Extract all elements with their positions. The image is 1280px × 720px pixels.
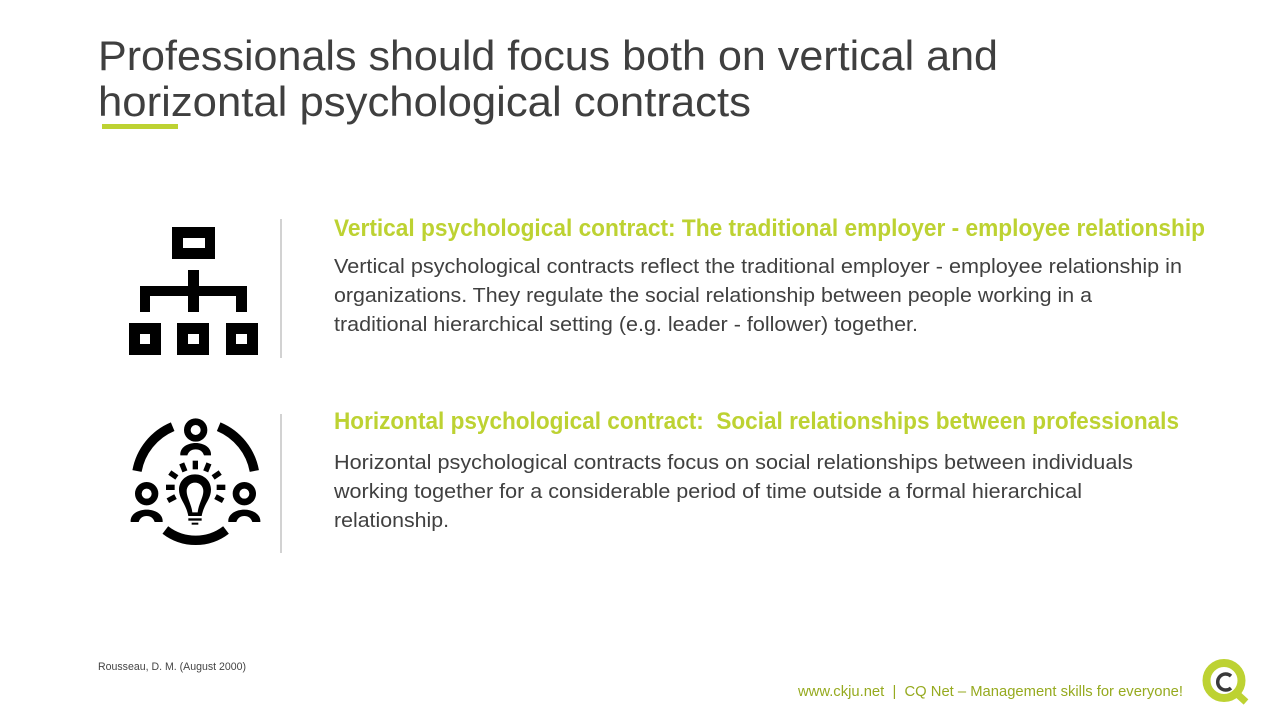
text block: vertical contract: organizations. They regulate the social relationship between people working in a xyxy=(334,284,1093,307)
heading: horizontal contract: Horizontal psychological contract: Social relationships between professionals xyxy=(334,408,1179,435)
title underline accent xyxy=(102,124,178,129)
panel: vertical psychological contract xyxy=(129,215,1205,358)
title xyxy=(98,32,998,125)
logo: CQ xyxy=(1206,663,1246,702)
divider: vertical xyxy=(280,219,282,358)
text block: horizontal contract: relationship. xyxy=(334,509,449,532)
text block: vertical contract: Vertical psychological contracts reflect the traditional employer - employee relationship in xyxy=(334,255,1182,278)
source citation: Rousseau, D. M. (August 2000) xyxy=(98,661,246,673)
text block: horizontal contract: Horizontal psychological contracts focus on social relationships between individuals xyxy=(334,451,1133,474)
icon: people around a light bulb xyxy=(131,422,260,540)
footer text: www.ckju.net | CQ Net – Management skills for everyone! xyxy=(797,684,1183,700)
text block: vertical contract xyxy=(334,255,1182,336)
heading: vertical contract: Vertical psychological contract: The traditional employer - employee relationship xyxy=(334,215,1205,242)
divider: horizontal xyxy=(280,414,282,553)
text block: horizontal contract xyxy=(333,451,1133,532)
panel: horizontal psychological contract xyxy=(131,408,1179,553)
title: horizontal psychological contracts xyxy=(98,78,751,125)
text block: horizontal contract: working together for a considerable period of time outside a formal hierarchical xyxy=(333,480,1082,503)
icon: organisation chart xyxy=(129,227,258,355)
title: Professionals should focus both on vertical and xyxy=(98,32,998,79)
text block: vertical contract: traditional hierarchical setting (e.g. leader - follower) together. xyxy=(334,313,918,336)
